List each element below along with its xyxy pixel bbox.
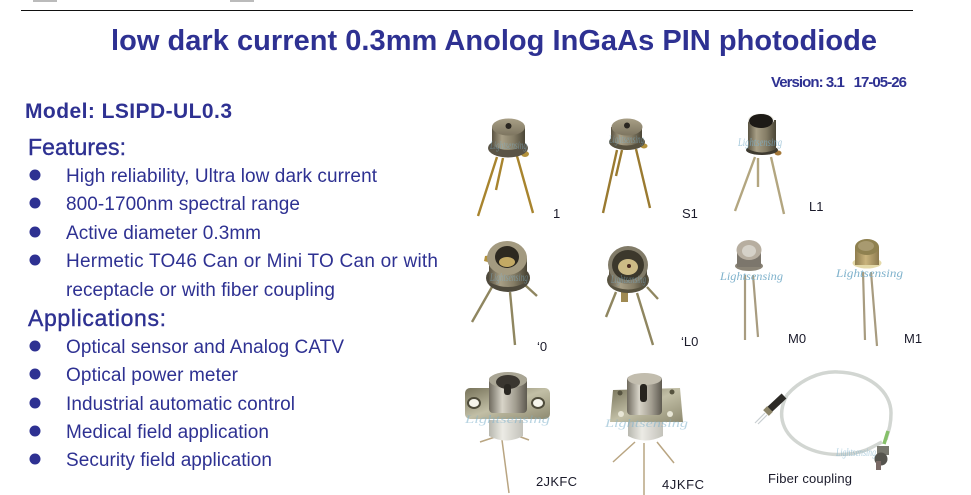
photo: 2JKFC receptacle: Lightsensing [464, 412, 550, 426]
photo: package S1 [603, 118, 698, 221]
photo: 4JKFC receptacle [604, 373, 704, 495]
title: low dark current 0.3mm Anolog InGaAs PIN photodiode [111, 25, 877, 57]
photo: package S1: Lightsensing [608, 132, 644, 146]
photo: package M0: M0 [788, 331, 806, 346]
version: Version: 3.1 17-05-26 [771, 74, 907, 91]
photo: 2JKFC receptacle [464, 372, 577, 493]
applications heading: Applications: [28, 305, 166, 331]
photo: package M0: Lightsensing [719, 269, 783, 283]
applications section [28, 305, 344, 471]
photo: package L0 [606, 246, 698, 349]
features list: 800-1700nm spectral range [66, 194, 300, 215]
photo: package L0: ‘L0 [681, 334, 698, 349]
photo: package 1 [478, 118, 560, 221]
photo: package 0: Lightsensing [489, 270, 528, 284]
model: Model: LSIPD-UL0.3 [25, 100, 232, 123]
top rule [21, 0, 913, 11]
photo: package L0: Lightsensing [610, 272, 646, 286]
features heading: Features: [28, 134, 126, 160]
photo: package M0 [719, 240, 806, 346]
features list: Active diameter 0.3mm [66, 223, 261, 244]
photo: package M1: M1 [904, 331, 922, 346]
photo: package L1: Lightsensing [737, 135, 782, 149]
applications list: Optical power meter [66, 365, 239, 386]
features list: High reliability, Ultra low dark current [66, 166, 378, 187]
photo: package L1: L1 [809, 199, 823, 214]
photo: package L1 [735, 114, 823, 214]
photo: 2JKFC receptacle: 2JKFC [536, 474, 577, 489]
applications list: Security field application [66, 450, 272, 471]
photo: package S1: S1 [682, 206, 698, 221]
photo: fiber coupling [755, 372, 891, 486]
photo: 4JKFC receptacle: 4JKFC [662, 477, 704, 492]
applications list: Industrial automatic control [66, 394, 295, 415]
features section [28, 134, 438, 301]
applications list: Optical sensor and Analog CATV [66, 337, 344, 358]
photo: fiber coupling: Lightsensing [835, 445, 876, 459]
applications list: Medical field application [66, 422, 269, 443]
features list: Hermetic TO46 Can or Mini TO Can or with [66, 251, 438, 272]
photo: fiber coupling: Fiber coupling [768, 471, 852, 486]
photo: package 1: Lightsensing [489, 138, 527, 152]
photo: 4JKFC receptacle: Lightsensing [604, 416, 688, 430]
applications list [30, 337, 344, 471]
features list: receptacle or with fiber coupling [66, 280, 335, 301]
photo: package M1 [835, 239, 922, 346]
photo: package 1: 1 [553, 206, 560, 221]
photo: package M1: Lightsensing [835, 266, 903, 280]
photo: package 0: ‘0 [537, 339, 547, 354]
features list [30, 166, 438, 301]
photo: package 0 [472, 241, 547, 354]
